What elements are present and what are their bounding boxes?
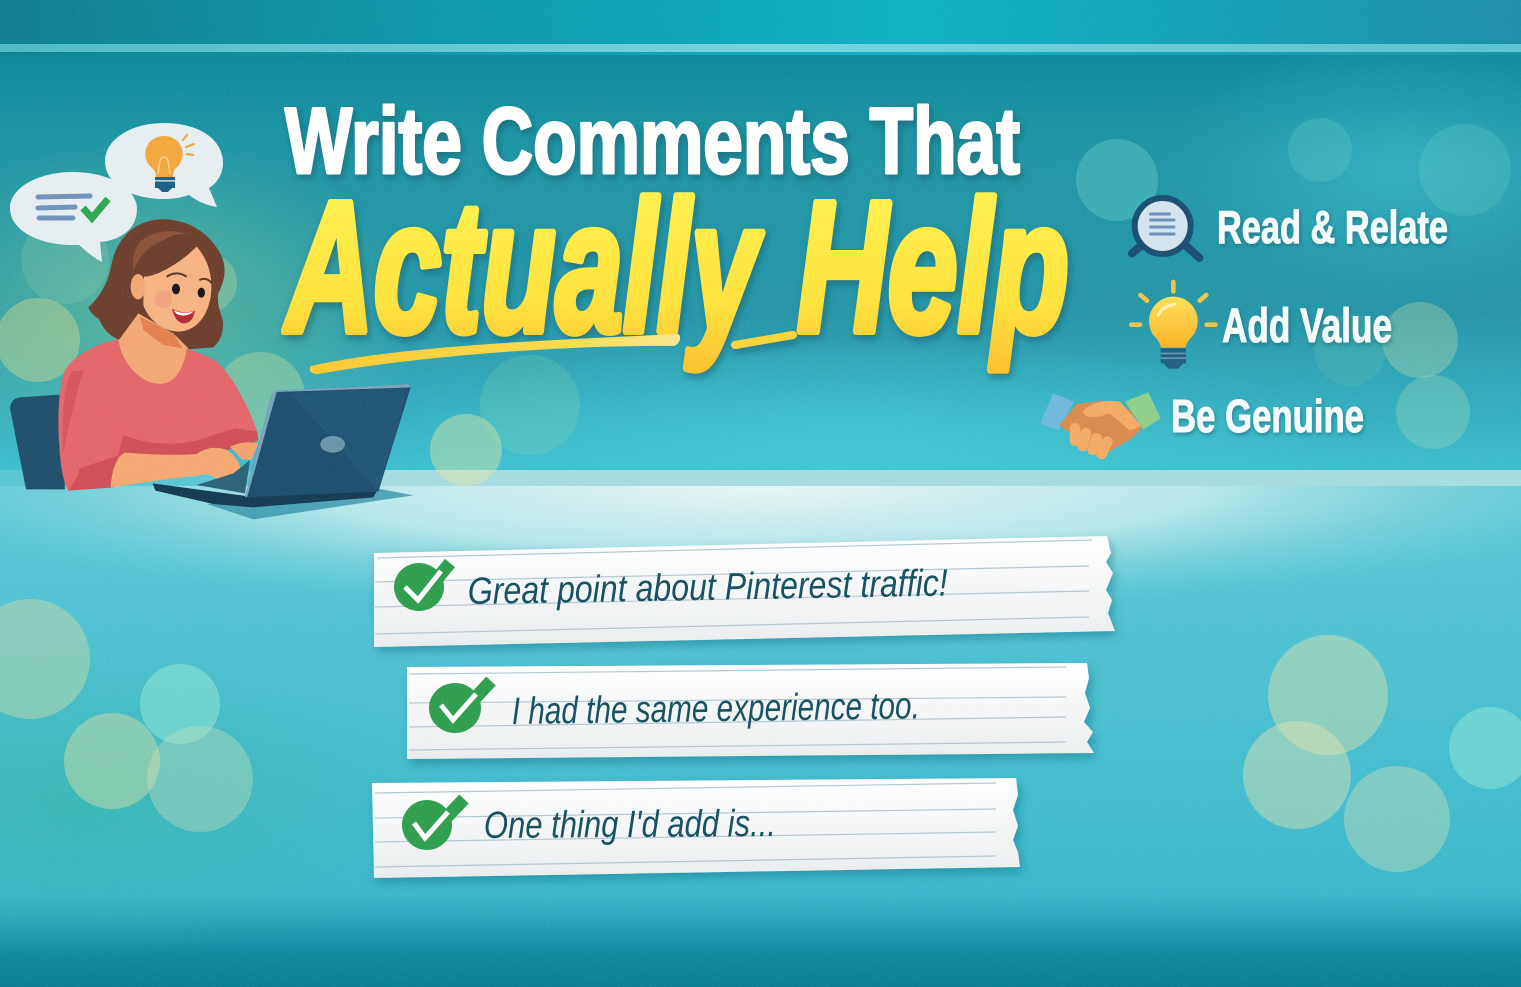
title bbox=[283, 88, 1069, 374]
sleeve shade bbox=[62, 370, 83, 453]
table shadow bbox=[207, 488, 413, 519]
icon: green check bbox=[402, 799, 464, 850]
sweater bbox=[58, 339, 258, 491]
label: Read & Relate bbox=[1217, 201, 1448, 253]
speech bubble: comment approved bbox=[10, 172, 137, 262]
icon: glowing bulb bbox=[1131, 282, 1215, 369]
eyes and mouth bbox=[155, 273, 212, 323]
torn paper bbox=[372, 778, 1020, 878]
laptop keyboard bbox=[197, 460, 250, 493]
tip: add value bbox=[1131, 282, 1392, 369]
comment text: One thing I'd add is... bbox=[484, 803, 776, 847]
paper note: same experience bbox=[407, 663, 1094, 759]
title line two: Actually bbox=[283, 164, 764, 371]
comment text: I had the same experience too. bbox=[512, 685, 920, 733]
paper note: great point bbox=[374, 536, 1115, 647]
ear bbox=[131, 274, 145, 299]
title line one: Write Comments That bbox=[285, 88, 1020, 193]
torn paper bbox=[407, 663, 1094, 759]
tip: read and relate bbox=[1132, 198, 1448, 258]
label: Be Genuine bbox=[1171, 390, 1364, 442]
illustration: woman at laptop bbox=[10, 219, 413, 519]
tip: be genuine bbox=[1040, 390, 1364, 455]
icon: orange bulb bbox=[145, 135, 194, 192]
comment text: Great point about Pinterest traffic! bbox=[467, 563, 948, 613]
icon: green check bbox=[83, 199, 108, 218]
sweater shade bbox=[68, 428, 258, 491]
neck bbox=[118, 313, 188, 384]
paper note: one thing bbox=[372, 778, 1020, 878]
laptop edge bbox=[245, 384, 411, 497]
underline swash bbox=[310, 334, 680, 374]
title line two: Help bbox=[797, 164, 1069, 371]
far hand bbox=[230, 442, 258, 460]
laptop base bbox=[153, 483, 377, 507]
label: Add Value bbox=[1222, 300, 1392, 353]
torn paper bbox=[374, 536, 1115, 647]
hair bbox=[88, 219, 225, 349]
icon: text lines bbox=[38, 196, 90, 218]
face bbox=[143, 247, 211, 332]
arm bbox=[111, 448, 242, 487]
laptop screen bbox=[245, 384, 411, 497]
icon: handshake bbox=[1040, 392, 1161, 455]
hair highlight bbox=[133, 231, 190, 270]
bokeh lights bbox=[0, 118, 1521, 872]
icon: magnifier bbox=[1132, 198, 1199, 258]
icon: green check bbox=[394, 563, 450, 611]
icon: green check bbox=[429, 681, 491, 733]
laptop logo bbox=[320, 436, 345, 453]
neck shadow bbox=[140, 317, 183, 348]
chair bbox=[10, 395, 65, 489]
speech bubble: idea bbox=[105, 123, 223, 207]
